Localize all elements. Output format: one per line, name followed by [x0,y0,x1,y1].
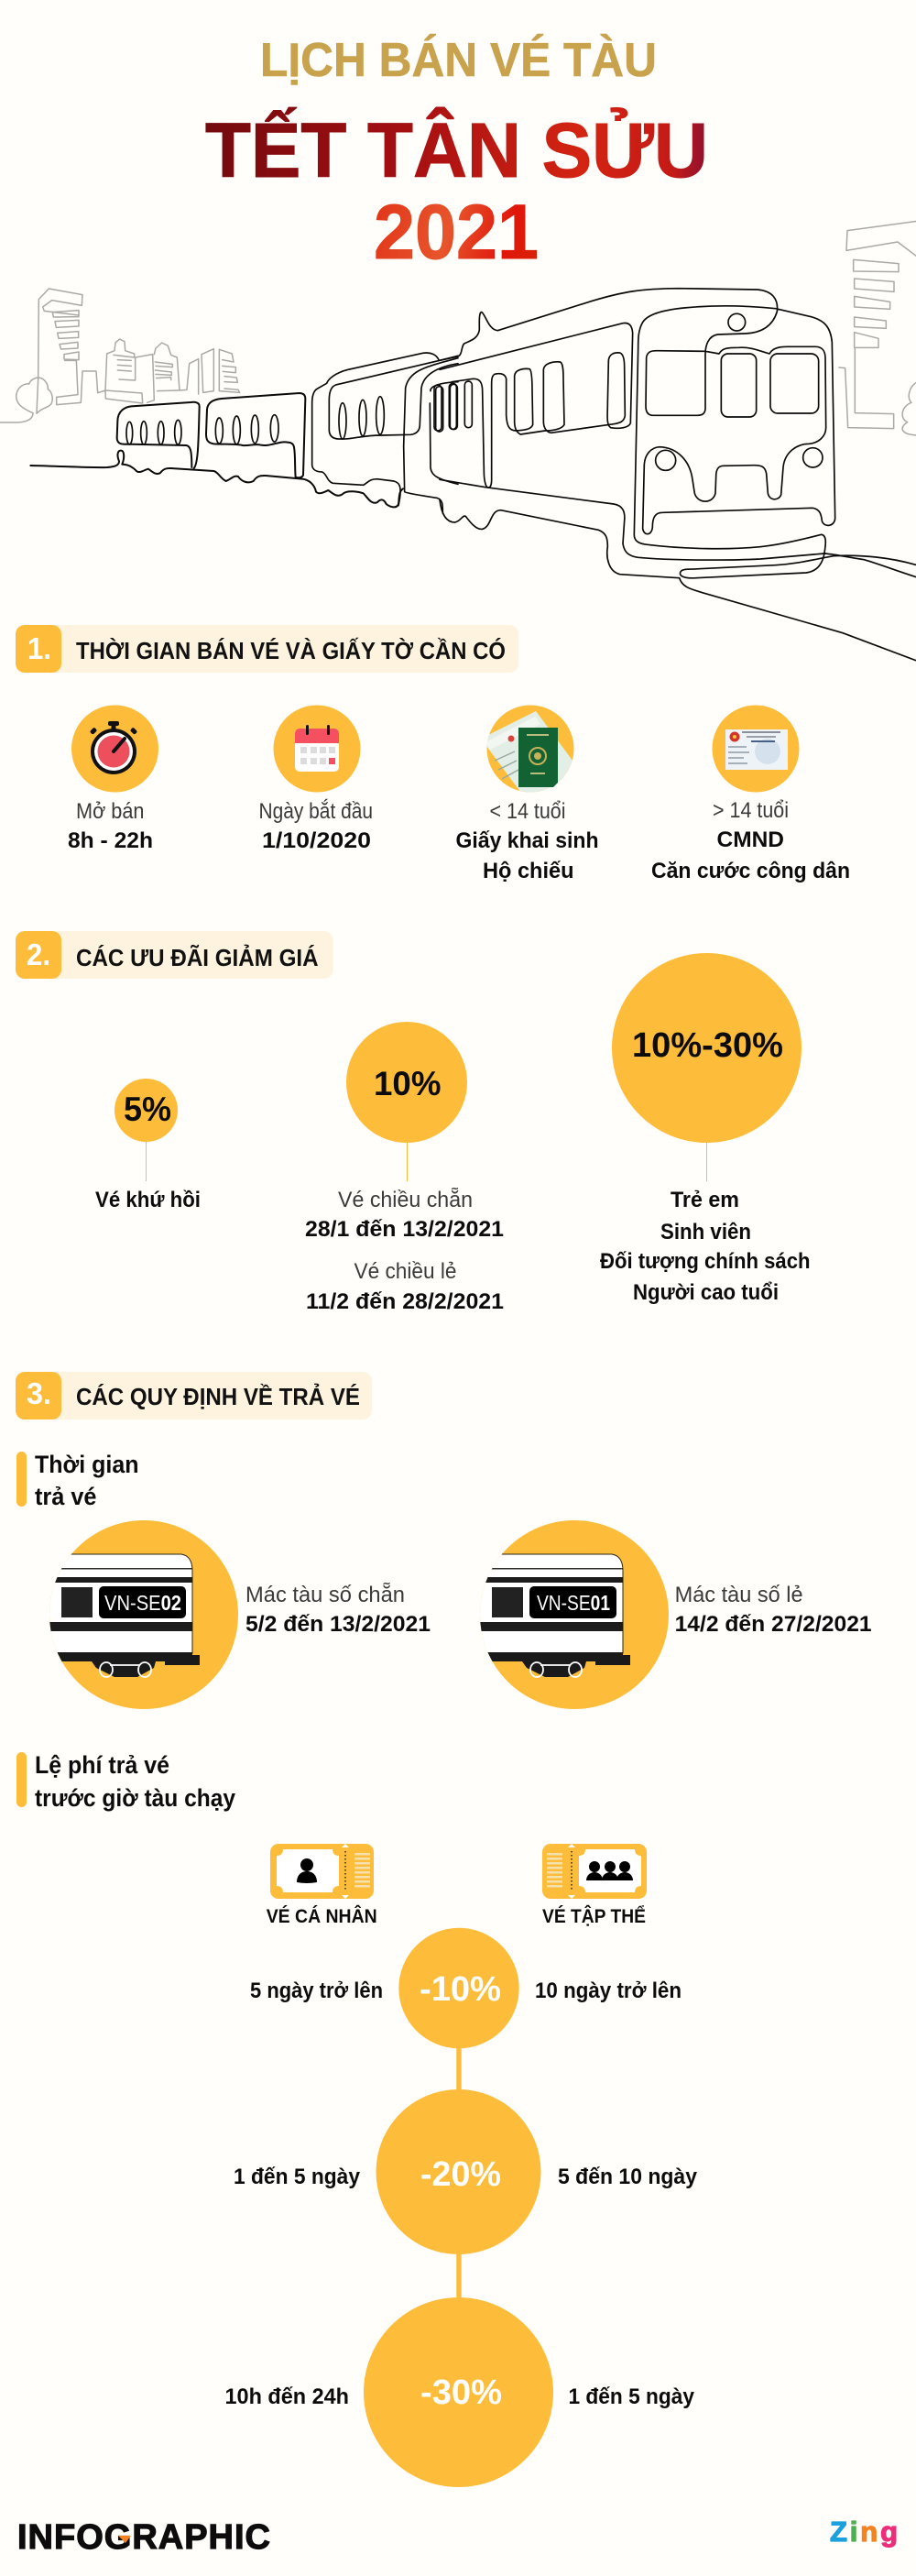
discount: 5 percent: Vé khứ hồi [95,1188,201,1212]
subheading: return fee: trước giờ tàu chạy [35,1784,235,1812]
section 2 heading: 2. [27,937,50,971]
discount: 10 to 30 percent: Sinh viên [660,1220,751,1244]
train badge: odd trains: Mác tàu số lẻ [675,1583,803,1607]
item: under 14 documents: Giấy khai sinh [456,828,599,853]
item: start date: 1/10/2020 [262,828,371,853]
fee step: minus 30 percent: 10h đến 24h [225,2384,349,2409]
section 2 heading: CÁC ƯU ĐÃI GIẢM GIÁ [76,944,319,971]
discount: 10 percent: Vé chiều chẵn [338,1187,473,1212]
item: opening hours [68,706,158,853]
title: 2021 [374,189,539,275]
discount: 10 to 30 percent: Đối tượng chính sách [600,1249,810,1274]
icon: individual ticket [270,1844,374,1899]
item: under 14 documents: < 14 tuổi [489,799,566,824]
label: individual ticket: VÉ CÁ NHÂN [267,1905,377,1927]
item: over 14 documents: Căn cước công dân [651,859,850,883]
title: LỊCH BÁN VÉ TÀU [260,34,657,87]
fee step: minus 30 percent [225,2297,695,2487]
discount: 10 to 30 percent: Người cao tuổi [633,1280,779,1305]
item: start date: Ngày bắt đầu [258,799,373,824]
fee step: minus 30 percent: -30% [420,2373,502,2412]
fee step: minus 10 percent: 10 ngày trở lên [535,1979,682,2003]
item: opening hours: Mở bán [76,799,145,824]
section 1 heading: THỜI GIAN BÁN VÉ VÀ GIẤY TỜ CẦN CÓ [76,637,506,664]
item: over 14 documents: CMND [716,828,784,852]
subheading: return time: trả vé [35,1483,97,1510]
discount: 10 to 30 percent: Trẻ em [671,1188,739,1212]
discount: 10 percent: 10% [374,1065,442,1102]
label: group ticket: VÉ TẬP THỂ [542,1905,646,1927]
fee step: minus 20 percent [234,2089,698,2254]
discount: 10 percent [305,1022,504,1314]
title [205,34,708,275]
icon: birth certificate and passport [487,711,572,792]
section 3 heading: 3. [27,1376,51,1410]
fee step: minus 20 percent: 5 đến 10 ngày [558,2165,698,2189]
train badge: even trains: 5/2 đến 13/2/2021 [245,1612,431,1637]
discount: 10 to 30 percent [600,953,810,1305]
item: over 14 documents [651,706,850,883]
icon: ID card [725,729,788,770]
illustration: line-art city and train [0,221,916,663]
footer: Zing logo: Zing [830,2516,898,2548]
icon: stopwatch [90,721,137,774]
train badge: even trains [37,1520,431,1709]
train badge: even trains: VN-SE02 [104,1591,181,1615]
icon: calendar [295,725,339,772]
section 3 heading [16,1372,372,1420]
item: start date [258,706,373,853]
fee step: minus 10 percent: 5 ngày trở lên [250,1979,383,2003]
section 1 heading: 1. [27,631,51,665]
item: opening hours: 8h - 22h [68,828,153,853]
connector between fee circles [456,2044,462,2302]
section 2 heading [16,931,333,979]
discount: 10 to 30 percent: 10%-30% [632,1026,783,1065]
fee step: minus 20 percent: -20% [420,2155,501,2194]
item: under 14 documents: Hộ chiếu [483,859,573,883]
subheading: return fee [16,1751,235,1812]
fee step: minus 10 percent: -10% [420,1970,501,2009]
discount: 10 percent: 11/2 đến 28/2/2021 [306,1289,504,1314]
fee step: minus 10 percent [250,1928,682,2048]
discount: 10 percent: Vé chiều lẻ [354,1259,456,1284]
discount: 10 percent: 28/1 đến 13/2/2021 [305,1217,504,1242]
subheading: return time: Thời gian [35,1451,139,1478]
footer: infographic wordmark: INFOGRAPHIC [17,2518,270,2557]
subheading: return fee: Lệ phí trả vé [35,1751,169,1779]
train badge: odd trains: 14/2 đến 27/2/2021 [675,1612,872,1637]
fee step: minus 20 percent: 1 đến 5 ngày [234,2165,361,2189]
fee step: minus 30 percent: 1 đến 5 ngày [568,2384,695,2409]
icon: group ticket [542,1844,647,1899]
discount: 5 percent [95,1079,201,1212]
train badge: even trains: Mác tàu số chẵn [245,1582,405,1607]
train badge: odd trains [467,1520,872,1709]
section 3 heading: CÁC QUY ĐỊNH VỀ TRẢ VÉ [76,1383,360,1410]
item: under 14 documents [456,706,599,883]
item: over 14 documents: > 14 tuổi [713,798,789,823]
train badge: odd trains: VN-SE01 [537,1591,610,1615]
subheading: return time [16,1451,139,1510]
title: TẾT TÂN SỬU [205,107,708,193]
discount: 5 percent: 5% [124,1091,171,1128]
section 1 heading [16,625,518,673]
